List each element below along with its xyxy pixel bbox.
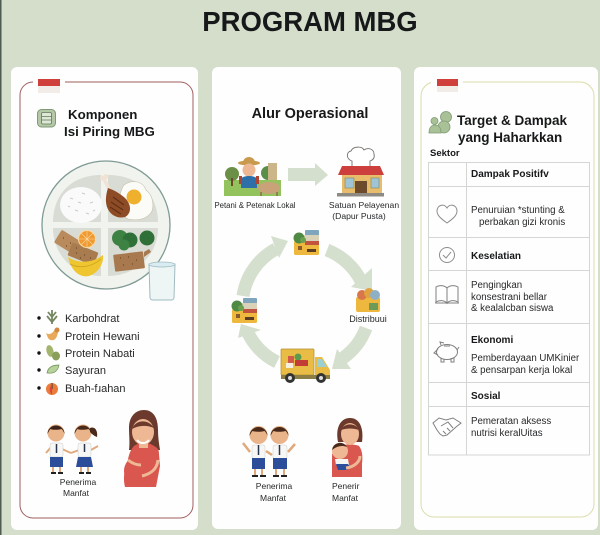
orange	[78, 230, 96, 248]
arrow: cycle 3	[332, 328, 366, 369]
heading: komponen: Komponen	[68, 107, 137, 122]
row: sosial: Sosial	[471, 391, 501, 402]
icon: food crate top	[294, 230, 319, 255]
panel: alur operasional	[212, 67, 401, 529]
label: penerima manfat kiri: Penerima	[256, 481, 292, 491]
chicken	[104, 179, 110, 191]
banana	[68, 255, 103, 276]
row: penurunan stunting: Penuruian *stunting &	[471, 205, 565, 216]
icon: food crate right	[356, 288, 380, 312]
label: distribusi: Distribuui	[349, 314, 387, 324]
row: ekonomi: Ekonomi	[471, 335, 513, 346]
list: food groups	[37, 310, 140, 395]
row: keselatian: Keselatian	[471, 251, 521, 262]
row: konsentrasi: & kealalcban siswa	[471, 303, 554, 314]
tempeh right	[113, 251, 145, 272]
title: PROGRAM MBG	[202, 6, 418, 37]
tempeh	[54, 230, 86, 257]
row: konsentrasi: Pengingkan	[471, 280, 522, 291]
heading: target dan dampak: Target & Dampak	[457, 113, 568, 128]
row: pemerataan: nutrisi keralUitas	[471, 428, 543, 439]
icon: flag	[33, 76, 65, 95]
label: penerima manfat kiri: Manfat	[260, 493, 287, 503]
label: penerima manfat kanan: Manfat	[332, 493, 359, 503]
illustration: pregnant woman	[124, 410, 160, 487]
icon: flag	[431, 76, 463, 95]
heading: komponen: Isi Piring MBG	[64, 124, 155, 139]
panel: target dan dampak	[414, 67, 598, 530]
illustration: kitchen building	[337, 147, 384, 196]
heading: alur operasional: Alur Operasional	[252, 106, 368, 122]
icon: food crate left	[232, 298, 257, 323]
row: konsentrasi: konsestrani bellar	[471, 292, 548, 303]
label: sektor: Sektor	[430, 148, 460, 159]
row: pemerataan: Pemeratan aksess	[471, 416, 551, 427]
arrow: cycle 2	[327, 250, 372, 291]
label: penerima manfat: Penerima	[60, 477, 96, 487]
icon: delivery truck	[281, 349, 330, 383]
label: satuan pelayanan: Satuan Pelayenan	[329, 200, 399, 210]
arrow: cycle 4	[238, 324, 277, 362]
icon: book	[435, 286, 459, 303]
rice	[60, 187, 102, 223]
icon: piggy bank	[434, 342, 459, 362]
row: pemberdayaan: Pemberdayaan UMKinier	[471, 353, 580, 364]
icon: handshake	[433, 418, 461, 436]
heading: target dan dampak: yang Haharkkan	[458, 130, 562, 145]
icon: people	[429, 112, 452, 133]
label: satuan pelayanan: (Dapur Pusta)	[332, 211, 386, 221]
row: dampak positif: Dampak Positifv	[471, 169, 549, 180]
illustration: mother and baby	[332, 418, 362, 477]
list: food groups: Protein Hewani	[65, 331, 140, 343]
list: food groups: Protein Nabati	[65, 348, 135, 360]
icon: menu list	[38, 110, 56, 127]
list: food groups: Buah-fɹahan	[65, 383, 126, 395]
table: dampak	[428, 162, 590, 455]
greens	[112, 230, 128, 246]
illustration: farmer	[224, 157, 281, 196]
list: food groups: Karbohdrat	[65, 313, 119, 325]
label: penerima manfat: Manfat	[63, 488, 90, 498]
plate illustration	[42, 161, 175, 300]
label: petani: Petani & Petenak Lokal	[214, 201, 296, 210]
icon: heart	[437, 205, 457, 223]
label: penerima manfat kanan: Penerir	[332, 481, 360, 491]
illustration: school children	[46, 424, 98, 473]
list: food groups: Sayuran	[65, 365, 106, 377]
arrow: cycle 1	[243, 236, 288, 296]
panel: komponen isi piring	[11, 67, 198, 530]
row: pemberdayaan: & pensarpan kerja lokal	[471, 365, 572, 376]
egg	[118, 182, 153, 220]
icon: check	[440, 248, 454, 262]
illustration: two school boys	[243, 426, 295, 476]
arrow: farmer to kitchen	[288, 163, 328, 186]
cycle diagram	[232, 230, 387, 383]
row: penurunan stunting: perbakan gizi kronis	[479, 217, 565, 228]
glass	[149, 264, 175, 300]
